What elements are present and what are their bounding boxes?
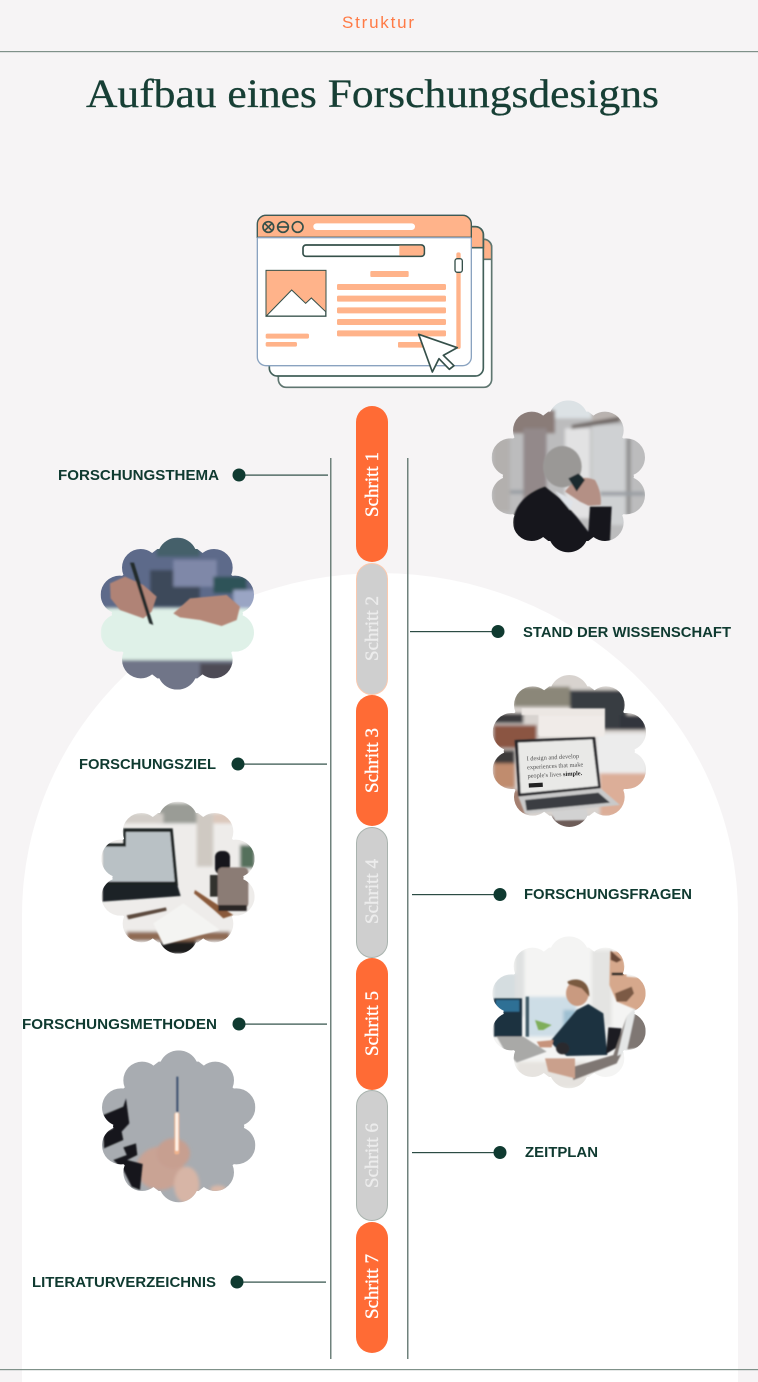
label: Literaturverzeichnis: LITERATURVERZEICHNIS <box>32 1274 216 1291</box>
step 3: Schritt 3 <box>362 728 383 793</box>
label: Forschungsthema <box>58 467 328 484</box>
step 7 <box>356 1222 388 1353</box>
label: Forschungsziel: FORSCHUNGSZIEL <box>79 756 216 773</box>
label: Forschungsmethoden <box>22 1016 327 1033</box>
step 2 <box>356 564 388 694</box>
step 4 <box>356 828 388 958</box>
step 1: Schritt 1 <box>362 452 383 517</box>
label: Forschungsthema: FORSCHUNGSTHEMA <box>58 467 219 484</box>
label: Zeitplan <box>412 1144 598 1161</box>
left timeline rail <box>330 458 332 1359</box>
icon: browser windows <box>257 215 492 387</box>
photo: rocket launch <box>102 1050 256 1202</box>
step 6: Schritt 6 <box>362 1123 383 1188</box>
label: Forschungsziel <box>79 756 327 773</box>
step 5 <box>356 958 388 1090</box>
title: Aufbau eines Forschungsdesigns <box>86 71 659 116</box>
photo: man on the phone <box>490 398 650 555</box>
footer rule <box>0 1369 758 1370</box>
photo: laptop on table: people's lives simple. <box>527 770 583 780</box>
photo: laptop on table <box>490 672 650 832</box>
header label: Struktur <box>342 13 414 32</box>
label: Stand der Wissenschaft: STAND DER WISSENSCHAFT <box>523 624 731 641</box>
photo: laptop on table: experiences that make <box>527 761 584 771</box>
photo: hands writing <box>100 538 254 690</box>
step 1 <box>356 406 388 562</box>
label: Forschungsfragen <box>412 886 692 903</box>
step 7: Schritt 7 <box>362 1254 383 1319</box>
label: Stand der Wissenschaft <box>410 624 731 641</box>
right timeline rail <box>407 458 408 1359</box>
photo: two men at computers <box>492 936 646 1088</box>
step 4: Schritt 4 <box>362 859 383 924</box>
white arch panel <box>22 573 738 1382</box>
photo: laptop and coffee mug <box>102 802 254 954</box>
header rule <box>0 51 758 52</box>
step 5: Schritt 5 <box>362 991 383 1056</box>
label: Forschungsmethoden: FORSCHUNGSMETHODEN <box>22 1016 217 1033</box>
step 6 <box>356 1090 388 1220</box>
label: Zeitplan: ZEITPLAN <box>525 1144 598 1161</box>
label: Literaturverzeichnis <box>32 1274 326 1291</box>
label: Forschungsfragen: FORSCHUNGSFRAGEN <box>524 886 692 903</box>
photo: laptop on table: I design and develop <box>526 753 579 763</box>
step 2: Schritt 2 <box>362 596 383 661</box>
step 3 <box>356 695 388 826</box>
timeline steps <box>356 406 388 1353</box>
